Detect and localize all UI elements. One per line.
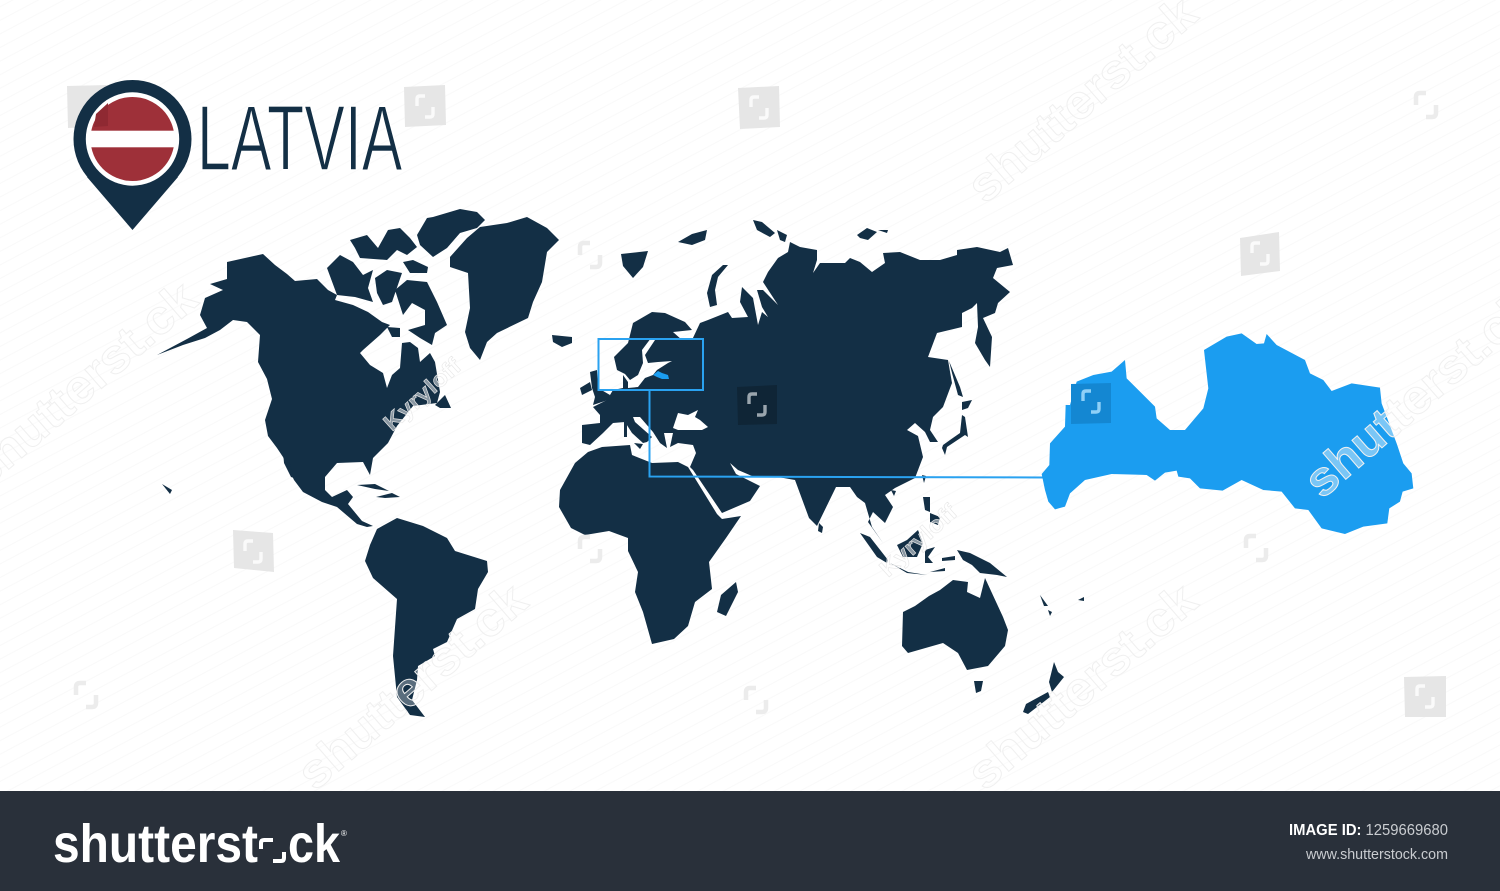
Iceland [552, 335, 572, 347]
Philippines [923, 497, 940, 525]
Newfoundland [435, 395, 451, 408]
Taiwan and Hainan [891, 475, 926, 496]
New Guinea [957, 550, 1007, 577]
Sulawesi [925, 547, 935, 563]
image id: IMAGE ID: 1259669680 [1289, 822, 1448, 839]
Tasmania [974, 681, 983, 693]
watermark tiles [67, 85, 1446, 717]
watermark text: shutterst.ck [287, 573, 538, 800]
watermark text: shutterst.ck [957, 573, 1208, 800]
connector: inset box and leader line [598, 339, 1045, 478]
Latvia enlarged map [1042, 333, 1413, 534]
Caribbean islands [357, 484, 400, 498]
Sri Lanka [818, 523, 823, 533]
title: LATVIA [197, 86, 403, 190]
Borneo [897, 530, 923, 557]
footer bar [0, 791, 1500, 891]
Australia [902, 578, 1008, 670]
location pin with Latvian flag [74, 80, 192, 230]
registered mark: ® [341, 829, 347, 838]
world map [157, 209, 1084, 717]
Mediterranean islands [624, 422, 643, 449]
watermark contributor name [378, 353, 962, 582]
Java [890, 563, 927, 575]
watermark text: shutterst.ck [957, 0, 1208, 213]
New Zealand [1023, 662, 1064, 714]
Madagascar [717, 582, 738, 616]
Africa [559, 445, 741, 644]
footer logo: ck [288, 814, 341, 874]
Eurasia [582, 242, 1013, 543]
Pacific islands [162, 484, 1084, 616]
Sumatra [860, 533, 888, 563]
website: www.shutterstock.com [1305, 847, 1448, 863]
Indonesian islands [930, 556, 955, 572]
Canadian Arctic islands [327, 209, 485, 345]
Latvia highlighted on the map [653, 371, 669, 379]
watermark contributor name: Kyryloff [874, 499, 962, 582]
Arctic Eurasian islands [621, 220, 888, 307]
South America [365, 518, 488, 717]
Japan [942, 400, 972, 455]
North America [157, 254, 440, 527]
Black Sea [673, 410, 708, 430]
watermark tile icons [245, 96, 1433, 707]
footer logo: shutterst [53, 814, 258, 874]
Baja California [283, 451, 294, 478]
Greenland [450, 217, 559, 360]
Sakhalin [949, 361, 963, 397]
watermark logo marks [76, 93, 1436, 712]
watermark contributor name: Kyryloff [378, 353, 466, 436]
British Isles [580, 370, 610, 405]
watermark tiles over map and Latvia [737, 383, 1111, 425]
